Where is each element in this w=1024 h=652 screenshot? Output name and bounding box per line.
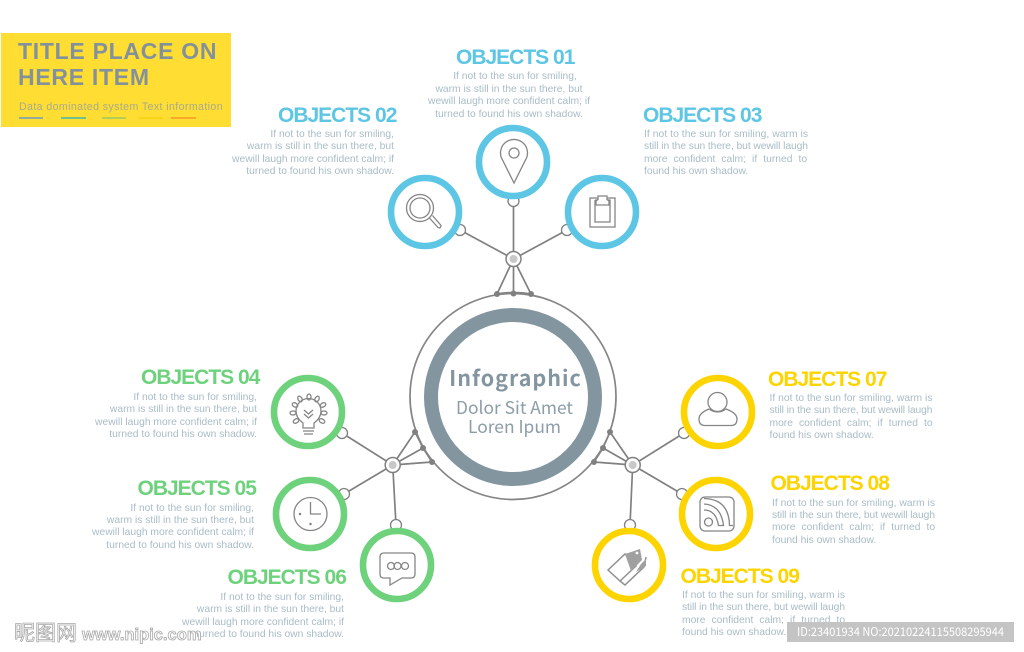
text 04: If not to the sun for smiling, bbox=[133, 392, 257, 403]
icon: price tags bbox=[608, 549, 646, 585]
subtitle: Data dominated system Text information bbox=[19, 101, 223, 113]
text 07: If not to the sun for smiling, warm is bbox=[770, 393, 932, 404]
text 03: found his own shadow. bbox=[644, 166, 748, 177]
center heading: Infographic bbox=[449, 362, 582, 393]
text 01: wewill laugh more confident calm; if bbox=[427, 96, 590, 107]
icon: user bbox=[699, 392, 737, 426]
text 03: more confident calm; if turned to bbox=[644, 154, 807, 165]
icon: clock bbox=[294, 498, 327, 530]
node 08 bbox=[682, 480, 750, 548]
text 01: turned to found his own shadow. bbox=[435, 109, 583, 120]
icon: speech bubble bbox=[380, 553, 415, 585]
node 03 bbox=[568, 178, 636, 246]
title panel bbox=[1, 33, 231, 127]
watermark: id bar: ID:23401934 NO:20210224115508295944 bbox=[797, 623, 1004, 640]
text 08: found his own shadow. bbox=[772, 535, 876, 546]
node 06 bbox=[363, 531, 431, 599]
node 01 bbox=[479, 128, 547, 196]
node 09 bbox=[595, 531, 663, 599]
heading 06: OBJECTS 06 bbox=[228, 566, 346, 589]
text 06: turned to found his own shadow. bbox=[196, 629, 344, 640]
icon: rss feed bbox=[700, 497, 734, 531]
icon: light bulb bbox=[290, 394, 327, 434]
text 06: If not to the sun for smiling, bbox=[220, 592, 344, 603]
text 08: If not to the sun for smiling, warm is bbox=[772, 498, 935, 509]
text 02: wewill laugh more confident calm; if bbox=[231, 154, 394, 165]
text 09: If not to the sun for smiling, warm is bbox=[682, 590, 845, 601]
text 06: wewill laugh more confident calm; if bbox=[181, 617, 344, 628]
watermark: site logo: www.nipic.com bbox=[81, 626, 202, 644]
icon: magnifier bbox=[406, 194, 441, 228]
text 01: If not to the sun for smiling, bbox=[453, 71, 577, 82]
text 04: wewill laugh more confident calm; if bbox=[94, 417, 257, 428]
text 02: turned to found his own shadow. bbox=[246, 166, 394, 177]
text 07: still in the sun there, but wewill laugh bbox=[770, 405, 933, 416]
outer ring bbox=[410, 294, 616, 500]
heading 09: OBJECTS 09 bbox=[680, 565, 799, 588]
text 05: turned to found his own shadow. bbox=[106, 540, 254, 551]
heading 03: OBJECTS 03 bbox=[643, 104, 762, 127]
text 05: warm is still in the sun there, but bbox=[106, 515, 254, 526]
node 02 bbox=[391, 178, 459, 246]
heading 08: OBJECTS 08 bbox=[770, 472, 890, 495]
text 09: more confident calm; if turned to bbox=[682, 615, 845, 626]
node 04 bbox=[274, 378, 342, 446]
text 02: warm is still in the sun there, but bbox=[246, 141, 394, 152]
text 05: wewill laugh more confident calm; if bbox=[91, 527, 254, 538]
text 08: more confident calm; if turned to bbox=[772, 522, 935, 533]
heading 02: OBJECTS 02 bbox=[278, 104, 397, 127]
icon: clipboard bbox=[590, 196, 615, 227]
colour key bbox=[19, 117, 196, 119]
branch joints bbox=[385, 252, 640, 472]
center subtext: Dolor Sit Amet bbox=[456, 395, 573, 420]
text 03: still in the sun there, but wewill laugh bbox=[644, 141, 808, 152]
text 08: still in the sun there, but wewill laugh bbox=[772, 510, 935, 521]
text 07: found his own shadow. bbox=[770, 430, 874, 441]
text 02: If not to the sun for smiling, bbox=[270, 129, 394, 140]
title text: TITLE PLACE ON bbox=[18, 38, 217, 64]
heading 04: OBJECTS 04 bbox=[141, 366, 261, 389]
heading 01: OBJECTS 01 bbox=[456, 46, 576, 69]
text 07: more confident calm; if turned to bbox=[770, 418, 933, 429]
icon: map pin bbox=[500, 139, 528, 183]
title text: HERE ITEM bbox=[18, 64, 150, 90]
heading 05: OBJECTS 05 bbox=[138, 477, 257, 500]
center subtext: Loren Ipum bbox=[468, 414, 561, 439]
text 04: turned to found his own shadow. bbox=[109, 429, 257, 440]
text 03: If not to the sun for smiling, warm is bbox=[644, 129, 808, 140]
text 09: found his own shadow. bbox=[682, 627, 786, 638]
text 01: warm is still in the sun there, but bbox=[434, 84, 583, 95]
text 04: warm is still in the sun there, but bbox=[109, 404, 257, 415]
text 05: If not to the sun for smiling, bbox=[130, 503, 254, 514]
central hub bbox=[410, 294, 616, 500]
inner ring bbox=[431, 315, 595, 479]
text 06: warm is still in the sun there, but bbox=[196, 604, 344, 615]
watermark: site logo bbox=[14, 617, 202, 647]
text 09: still in the sun there, but wewill laugh bbox=[682, 602, 845, 613]
node 05 bbox=[276, 480, 344, 548]
node 07 bbox=[684, 378, 752, 446]
heading 07: OBJECTS 07 bbox=[768, 368, 887, 391]
watermark: site logo: 昵图网 bbox=[14, 617, 77, 647]
network connectors bbox=[336, 196, 690, 530]
